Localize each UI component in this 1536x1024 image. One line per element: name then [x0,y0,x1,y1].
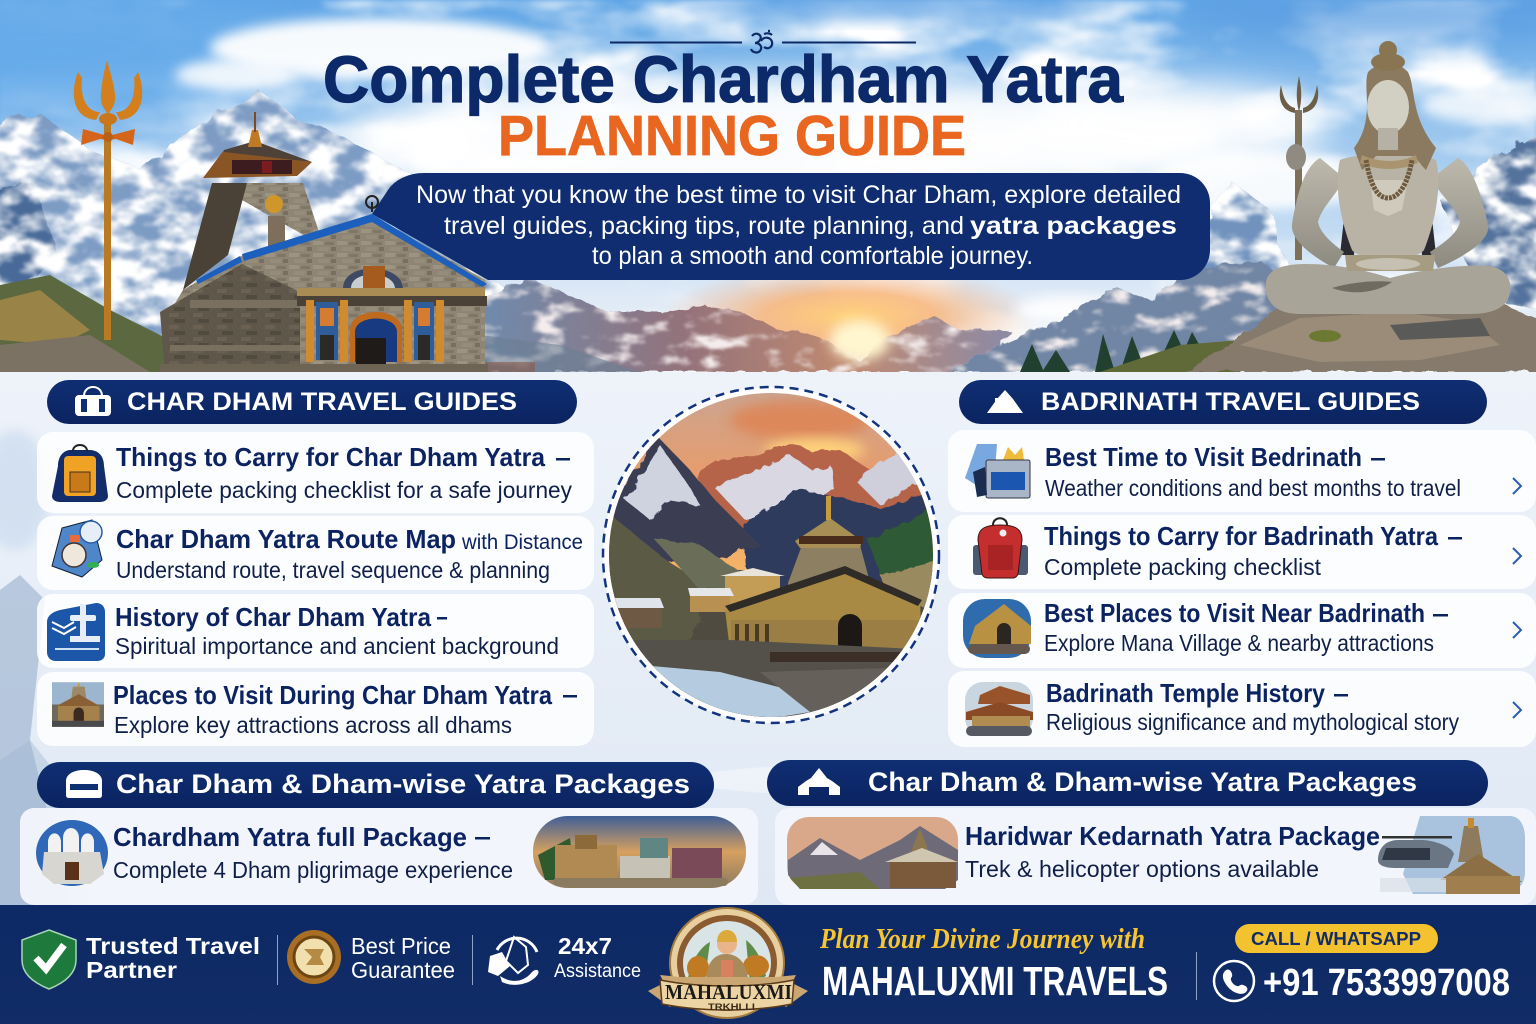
package card: Chardham Yatra full Package [113,822,467,852]
chevron [1513,548,1521,564]
row: places to visit: Places to Visit During Char Dham Yatra [113,680,552,710]
row: route map [37,516,594,590]
face [1367,80,1409,134]
row: route map: Char Dham Yatra Route Map [116,524,456,554]
trident: left [74,60,142,340]
call label pill [1235,924,1438,953]
icon: phone [1214,961,1254,1001]
logo: Mahaluxmi Travels: MAHALUXMI [665,980,792,1004]
intro callout [372,173,1210,280]
icon: temple thumbnail [52,682,104,727]
row: things to carry: Complete packing checklist [1044,554,1321,580]
blue roof [242,214,487,287]
row: things to carry [948,515,1536,589]
sunset glow [672,280,1026,362]
package card: Trek & helicopter options available [965,856,1319,882]
right mountains [1190,130,1536,310]
icon: shield [22,930,76,989]
badge: trusted travel partner: Partner [86,957,177,983]
footer band [0,905,1536,1024]
badge: 24x7 assistance: Assistance [554,961,641,982]
torso [1338,154,1438,259]
badge: best price guarantee: Guarantee [351,957,455,983]
hero background scene [0,0,1536,373]
brand name: MAHALUXMI TRAVELS [822,958,1168,1004]
crossed legs [1266,264,1510,314]
temple spire [165,183,330,372]
thumbnail: white temple [36,820,108,886]
row: history [37,594,594,668]
heading pill: Char Dham & Dham-wise Yatra Packages [868,767,1417,797]
row: temple history: Badrinath Temple History [1046,678,1325,708]
package card [775,808,1536,905]
arms [1292,158,1344,268]
hair [1354,63,1436,170]
centre circular photo: Kedarnath at sunset [600,385,942,730]
row: things to carry: Things to Carry for Badrinath Yatra [1044,521,1438,551]
temple: Kedarnath [160,112,488,373]
central mountains [470,278,1010,372]
ribbon [648,975,808,1007]
statue: meditating Shiva [1185,41,1536,372]
trees [1020,330,1208,372]
intro text: yatra packages [970,212,1177,240]
row: best places [948,593,1536,668]
icon: blue history book [47,603,105,661]
chevron [1513,702,1521,718]
ornament: om divider [610,31,916,52]
row: places to visit [37,672,594,746]
row: route map: Understand route, travel sequence & planning [116,557,550,583]
icon: temples [798,768,840,795]
thumbnail: Kedarnath valley [787,817,958,889]
temple body [242,216,485,372]
package card [20,808,758,905]
badge: best price guarantee [287,930,455,984]
row: things to carry [37,432,594,513]
heading pill [47,380,577,424]
row: temple history [948,671,1536,747]
row: best time: Best Time to Visit Bedrinath [1045,442,1362,472]
intro text [416,181,1181,270]
badge: trusted travel partner [22,930,260,989]
temple door and panels [343,268,403,288]
panel: char dham travel guides [37,380,594,746]
row: things to carry: Things to Carry for Char Dham Yatra [116,442,546,472]
logo: Mahaluxmi Travels: TRKHLLI [708,1002,755,1012]
thumbnail: temple history [965,682,1033,736]
icon: gold medal [287,930,341,984]
row: best places: Best Places to Visit Near Badrinath [1044,598,1425,628]
hair behind [1340,200,1436,255]
snow mountains left [0,90,504,336]
chevron [1513,478,1521,494]
row: history: History of Char Dham Yatra [115,602,431,632]
thumbnail: helicopter and temple [1378,816,1525,894]
heading pill: Char Dham & Dham-wise Yatra Packages [116,769,690,799]
row: temple history: Religious significance and mythological story [1046,709,1459,735]
panel: yatra packages left [20,762,758,905]
package card: Complete 4 Dham pligrimage experience [113,857,513,883]
chevron [1513,622,1521,638]
icon: map and compass [52,520,102,577]
icon: calendar [965,444,1030,498]
intro text: Now that you know the best time to visit Char Dham, explore detailed [416,181,1181,209]
panel: badrinath travel guides [948,380,1536,747]
row: history: Spiritual importance and ancient background [115,633,559,659]
badge: best price guarantee: Best Price [351,933,451,959]
thumbnail: Badrinath temple [963,599,1031,658]
heading pill: CHAR DHAM TRAVEL GUIDES [127,388,517,416]
icon: mountain temple [987,390,1023,413]
panel: yatra packages right [767,760,1536,905]
call label pill: CALL / WHATSAPP [1251,929,1421,949]
icon: luggage [76,387,110,415]
row: best places: Explore Mana Village & nearby attractions [1044,630,1434,656]
tagline: Plan Your Divine Journey with [819,923,1145,955]
rock [1185,303,1536,372]
logo: Mahaluxmi Travels [648,908,808,1018]
heading pill [767,760,1488,806]
intro text: to plan a smooth and comfortable journey. [592,242,1033,270]
heading pill: BADRINATH TRAVEL GUIDES [1041,388,1420,416]
heading pill [37,762,714,808]
icon: phone hands [488,937,539,985]
icon: tour bus [66,770,102,798]
heading pill [959,380,1487,424]
row: best time: Weather conditions and best months to travel [1045,475,1461,501]
badge: 24x7 assistance [488,933,641,985]
contact [1214,924,1510,1004]
badge: 24x7 assistance: 24x7 [558,933,612,959]
row: route map: with Distance [461,531,583,554]
title: Complete Chardham Yatra [323,42,1124,116]
package card: Haridwar Kedarnath Yatra Package [965,821,1380,851]
thumbnail: four dhams [533,816,746,888]
badge: trusted travel partner: Trusted Travel [86,933,260,959]
row: things to carry: Complete packing checklist for a safe journey [116,477,572,503]
content area background [0,372,1536,906]
subtitle: PLANNING GUIDE [498,104,966,168]
icon: yellow backpack [52,445,108,502]
icon: red backpack [973,518,1028,578]
row: best time [948,430,1536,512]
intro text: travel guides, packing tips, route planning, and [444,212,964,240]
row: places to visit: Explore key attractions across all dhams [114,712,512,738]
trident in hand [1280,76,1318,113]
